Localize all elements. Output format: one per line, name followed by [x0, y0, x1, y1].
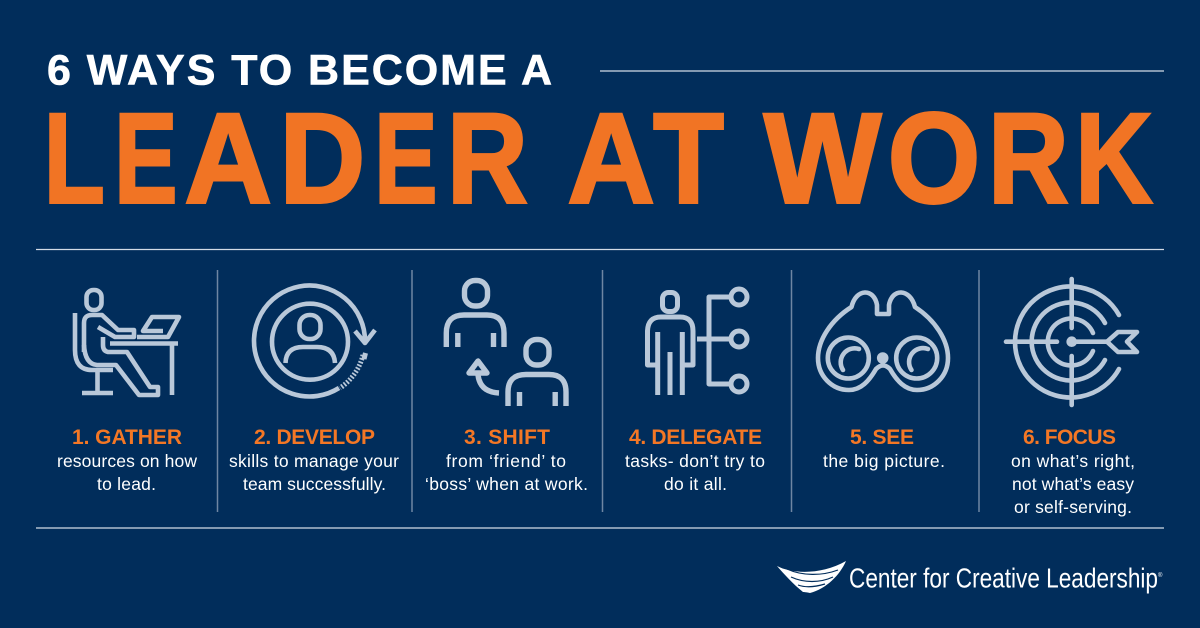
panel: see	[818, 292, 948, 471]
title: leader at work: T	[653, 88, 724, 230]
step 3 text: ‘boss’ when at work.	[425, 474, 588, 494]
step 3 text: 3. SHIFT	[464, 426, 550, 449]
panel: delegate	[625, 289, 765, 494]
step 1 text: to lead.	[97, 474, 156, 494]
step 6 text: not what’s easy	[1012, 474, 1134, 494]
step 6 text: on what’s right,	[1011, 451, 1135, 471]
step 1 text: 1. GATHER	[72, 426, 182, 449]
panel: shift	[425, 280, 588, 494]
icon: two people with arrow	[446, 280, 566, 406]
title: leader at work: D	[280, 88, 365, 230]
icon: binoculars	[818, 292, 948, 390]
step 2 text: skills to manage your	[229, 451, 399, 471]
step 1 text: resources on how	[57, 451, 197, 471]
title: leader at work: K	[1075, 88, 1152, 230]
step 5 text: 5. SEE	[850, 426, 914, 449]
step 4 text	[625, 426, 765, 494]
title: leader at work: L	[44, 88, 105, 230]
icon: person with branching nodes	[648, 289, 747, 395]
step 4 text: 4. DELEGATE	[629, 426, 762, 449]
step 4 text: do it all.	[664, 474, 727, 494]
title: leader at work: W	[764, 88, 881, 230]
step 2 text: 2. DEVELOP	[254, 426, 375, 449]
step 4 text: tasks- don’t try to	[625, 451, 765, 471]
step 6 text: 6. FOCUS	[1023, 426, 1116, 449]
panel: develop	[229, 285, 399, 494]
heading: 6 ways to become a: 6 WAYS TO BECOME A	[47, 46, 552, 94]
title: leader at work: E	[114, 88, 177, 230]
step 5 text	[823, 426, 945, 471]
logo mark: wing	[777, 561, 846, 593]
title: leader at work: R	[447, 88, 528, 230]
step 5 text: the big picture.	[823, 451, 945, 471]
registered mark: ®	[1158, 572, 1163, 579]
title: leader at work: E	[374, 88, 437, 230]
step 2 text	[229, 426, 399, 494]
panel: focus	[1006, 279, 1137, 517]
icon: person at desk	[75, 290, 179, 395]
step 2 text: team successfully.	[243, 474, 386, 494]
title: leader at work: A	[184, 88, 272, 230]
icon: person in cycle arrow	[254, 285, 375, 396]
title: leader at work: R	[988, 88, 1069, 230]
step 6 text	[1011, 426, 1135, 517]
logo: center for creative leadership	[777, 561, 1163, 594]
step 1 text	[57, 426, 197, 494]
title: leader at work	[44, 88, 1152, 230]
panel: gather	[57, 290, 197, 494]
icon: target with arrow	[1006, 279, 1137, 405]
step 6 text: or self-serving.	[1014, 497, 1132, 517]
step 3 text	[425, 426, 588, 494]
step 3 text: from ‘friend’ to	[446, 451, 566, 471]
title: leader at work: O	[888, 88, 980, 230]
title: leader at work: A	[568, 88, 655, 230]
